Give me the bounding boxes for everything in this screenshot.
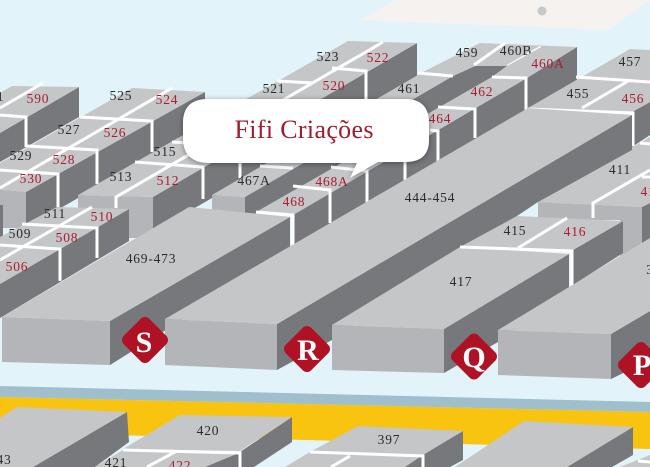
block row 525-530: 529 [10, 148, 32, 163]
block row 513-523: 522 [367, 50, 389, 65]
badge P [616, 340, 650, 390]
block 455-457: 456 [622, 91, 644, 106]
block row 511-506: 511 [44, 206, 66, 221]
callout: Fifi Criações [183, 99, 429, 178]
badge R: R [297, 334, 319, 367]
block row 513-523: 523 [317, 49, 339, 64]
block row 459-467A: 460B [500, 43, 532, 58]
block row 525-530: 524 [156, 92, 178, 107]
road: yellow strip [0, 397, 650, 449]
block row 513-523: 515 [154, 144, 176, 159]
block 415-416 [460, 216, 623, 285]
block 455-457 [528, 49, 650, 147]
block 411 [538, 137, 650, 256]
block row 511-506: 506 [6, 259, 28, 274]
block R 444-454: 444-454 [405, 190, 455, 205]
block row 525-530: 526 [104, 125, 126, 140]
block row 460A-468: 464 [429, 111, 451, 126]
block row 513-523 [78, 41, 417, 238]
block row 460A-468: 468 [283, 194, 305, 209]
block row 513-523: 513 [110, 169, 132, 184]
block row 525-530: 530 [20, 171, 42, 186]
block row 511-506: 509 [9, 226, 31, 241]
block row 525-530: 527 [58, 122, 80, 137]
block row 525-530 [0, 88, 205, 228]
block row 460A-468: 460A [531, 56, 565, 71]
badge S [120, 315, 170, 365]
block row 513-523: 512 [157, 173, 179, 188]
block 415-416: 415 [504, 223, 526, 238]
dark sliver at left edge [0, 205, 3, 237]
callout: Fifi Criações: Fifi Criações [234, 115, 374, 144]
block row 513-523: 520 [323, 78, 345, 93]
lower block right [455, 421, 633, 467]
lower block 43 [0, 407, 129, 467]
block 411: 411 [609, 162, 631, 177]
block S 469-473 [2, 207, 290, 365]
block row 525-530: 528 [53, 152, 75, 167]
block Q 417 [332, 247, 572, 373]
badge R [282, 324, 332, 374]
block row 459-467A: 461 [398, 81, 420, 96]
lower block 397 [285, 426, 463, 467]
block row 460A-468: 468A [315, 174, 349, 189]
lower block 397: 397 [378, 432, 400, 447]
block Q 417: 417 [450, 274, 472, 289]
lower block corner [620, 455, 650, 467]
block row 459-467A: 459 [456, 45, 478, 60]
block row 511-506 [0, 206, 129, 318]
block row 460A-468: 462 [471, 84, 493, 99]
lower block 420-422: 420 [197, 423, 219, 438]
badge Q: Q [462, 341, 486, 374]
block row 459-467A: 467A [237, 173, 271, 188]
block R 444-454 [165, 108, 632, 370]
block 455-457: 457 [619, 54, 641, 69]
block row 525-530: 525 [110, 88, 132, 103]
lower block 420-422 [95, 415, 292, 467]
block P [498, 238, 650, 379]
block row 513-523: 521 [263, 81, 285, 96]
road: blue strip [0, 386, 650, 412]
block S 469-473: 469-473 [126, 251, 176, 266]
block 415-416: 416 [564, 224, 586, 239]
block row 590: 590 [27, 91, 49, 106]
block row 459-467A [212, 43, 577, 216]
badge S: S [136, 326, 152, 359]
badge Q [449, 331, 499, 382]
block row 460A-468 [256, 47, 577, 246]
block row 590 [0, 83, 79, 162]
plaza plane with marker dot [360, 0, 650, 30]
block 455-457: 455 [567, 86, 589, 101]
block row 511-506: 508 [56, 230, 78, 245]
block row 511-506: 510 [91, 209, 113, 224]
